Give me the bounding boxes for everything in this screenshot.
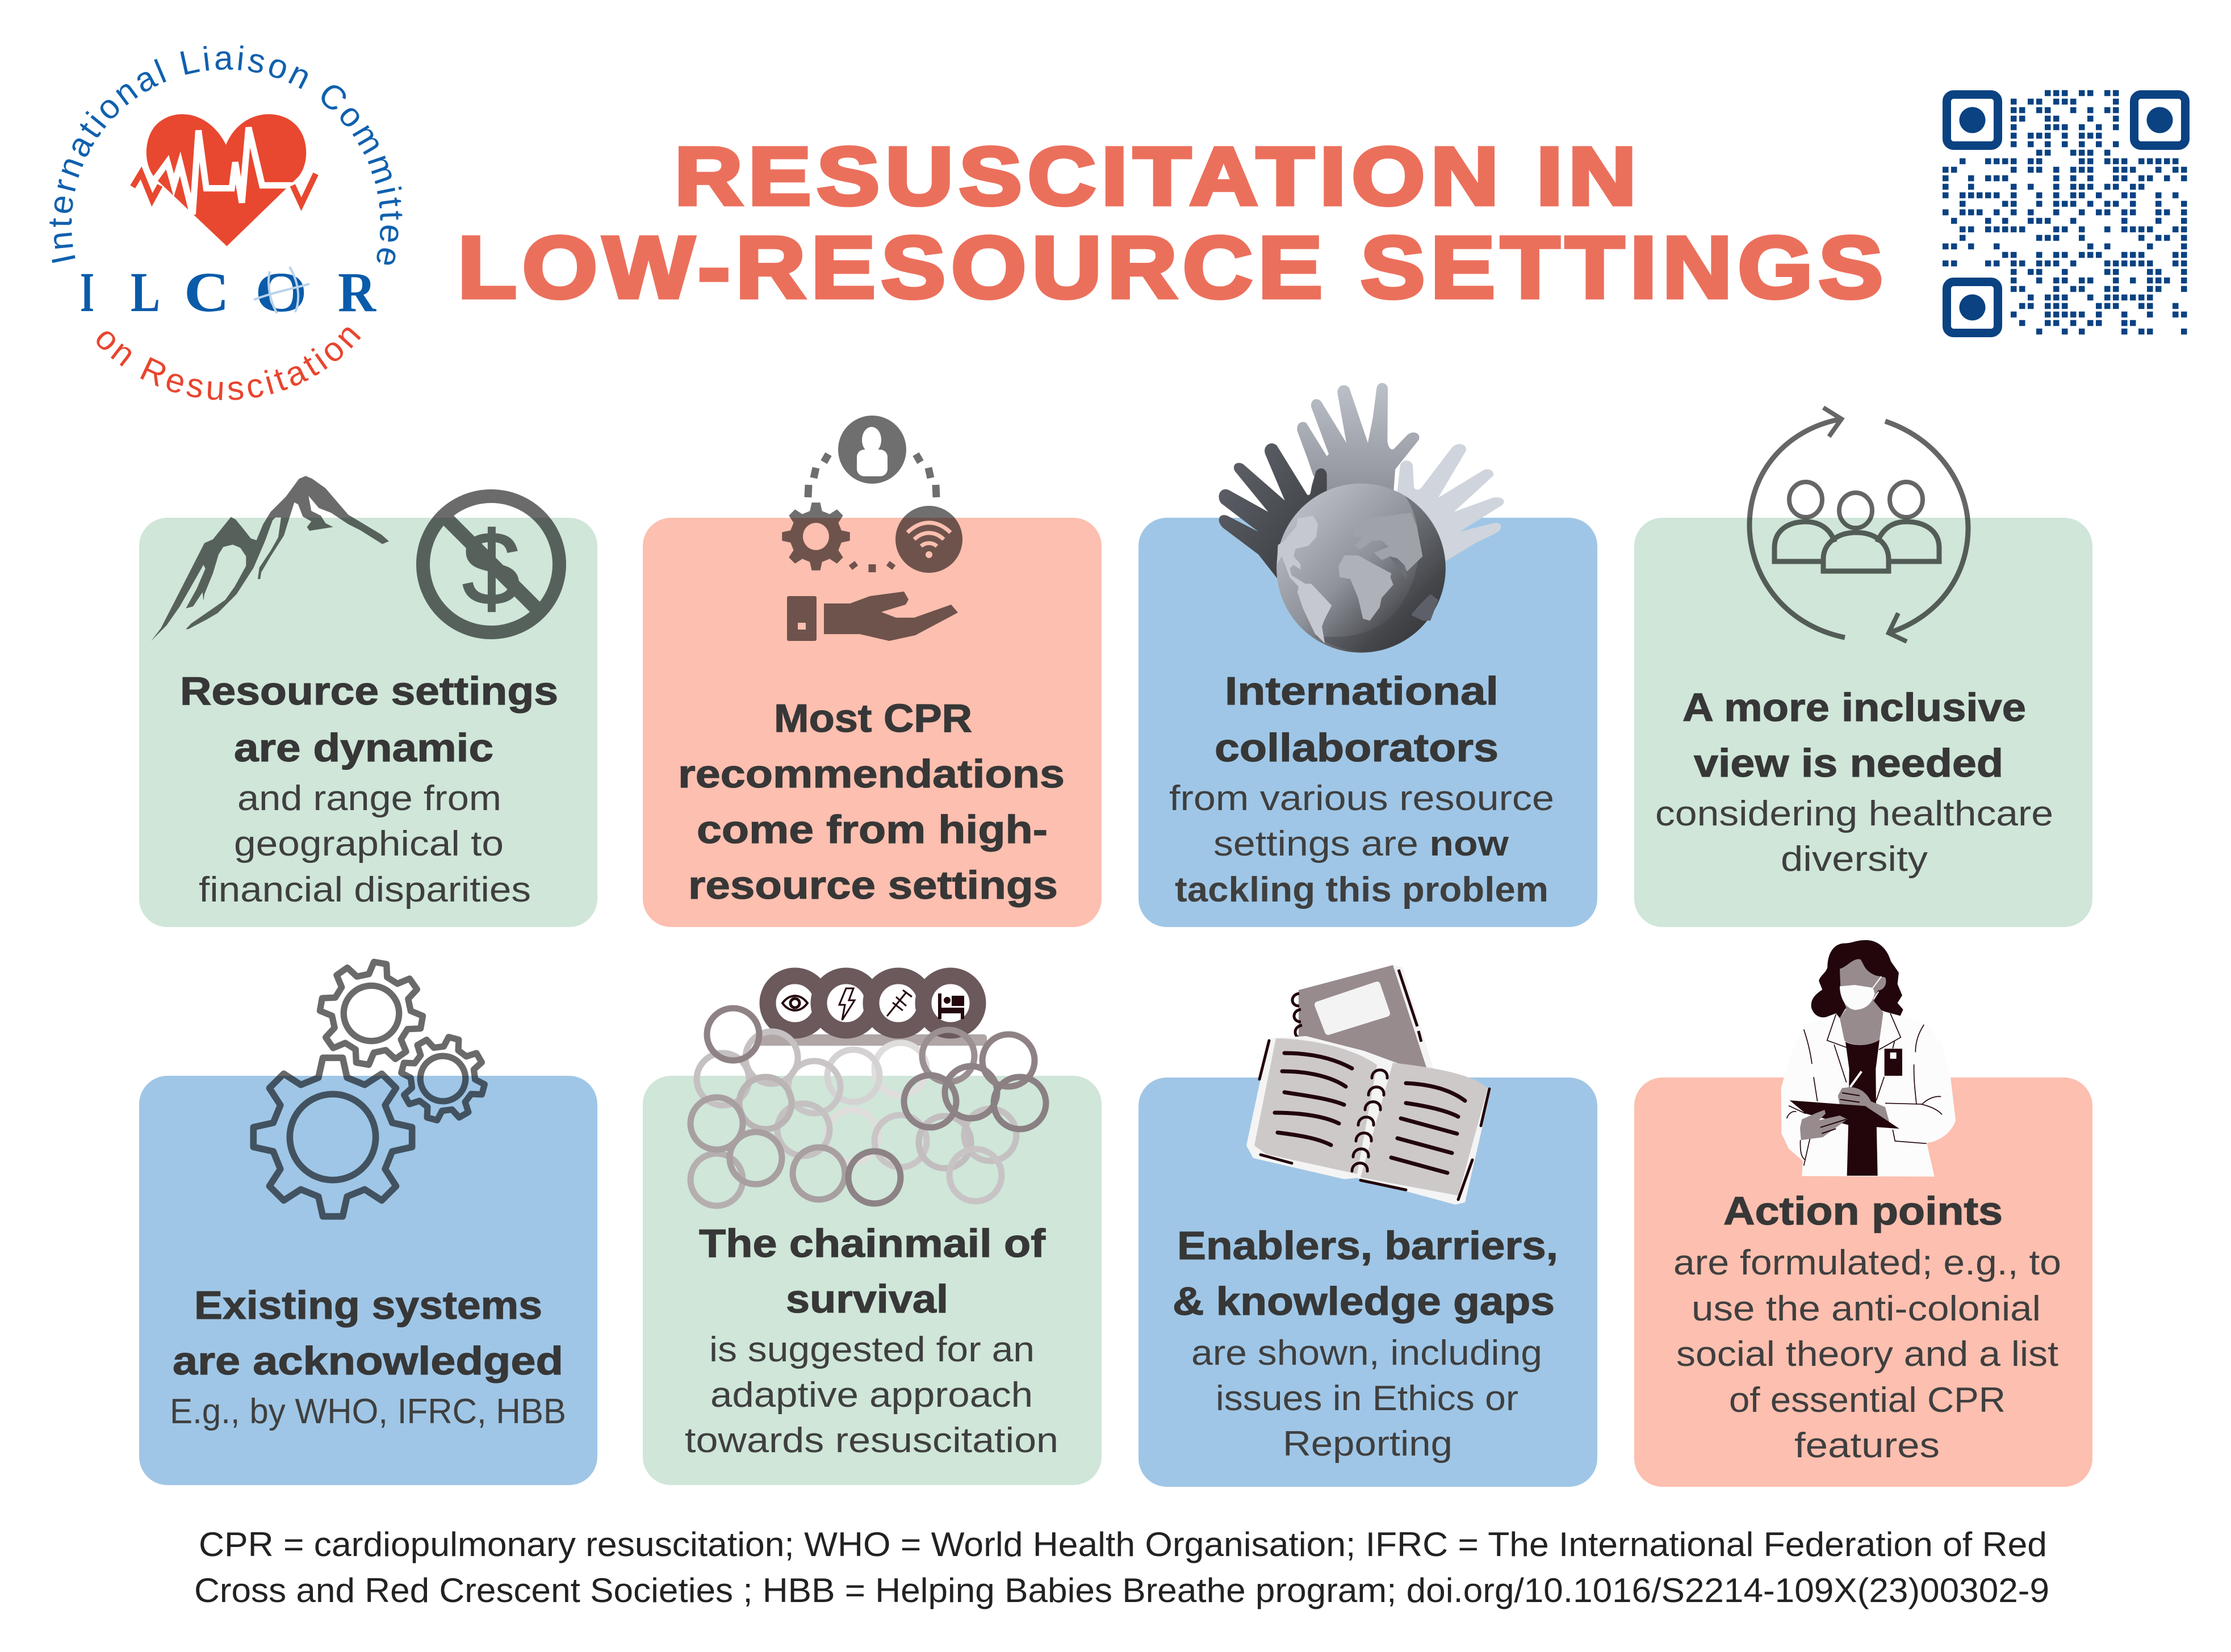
text: enablers: Reporting xyxy=(1283,1424,1453,1464)
panel: action points xyxy=(1634,940,2092,1487)
title xyxy=(458,131,1889,316)
text: inclusive view: view is needed xyxy=(1694,741,2003,785)
text: resource settings xyxy=(180,669,558,909)
text: most CPR: resource settings xyxy=(688,863,1058,907)
panel: existing systems xyxy=(139,954,597,1485)
text: resource settings: are dynamic xyxy=(234,726,493,770)
text: resource settings: geographical to xyxy=(234,824,504,863)
logo heart with ECG trace xyxy=(133,114,316,246)
text: chainmail: is suggested for an xyxy=(709,1330,1035,1369)
text: international collaborators: tackling this problem xyxy=(1175,870,1548,909)
logo ring text: on Resuscitation: on Resuscitation xyxy=(97,327,361,400)
icon: hands around a globe xyxy=(1219,383,1504,653)
text: inclusive view: considering healthcare xyxy=(1655,794,2053,833)
text: inclusive view: A more inclusive xyxy=(1682,685,2026,729)
grey upper hand xyxy=(1297,383,1420,496)
logo wordmark: ILCOR xyxy=(80,261,377,324)
icon: person, gear, wifi and hand xyxy=(782,416,962,641)
icon: no money: $ xyxy=(462,510,520,626)
text: action points: of essential CPR xyxy=(1729,1381,2006,1420)
text: action points: features xyxy=(1794,1426,1940,1465)
panel: most CPR recommendations xyxy=(643,416,1102,927)
icon: three gears xyxy=(253,954,494,1217)
logo wordmark: ILCOR: R xyxy=(338,261,377,324)
dark left hand xyxy=(1219,443,1327,578)
text: chainmail: adaptive approach xyxy=(710,1376,1033,1415)
logo wordmark: ILCOR: L xyxy=(131,261,160,324)
text: action points: are formulated; e.g., to xyxy=(1673,1243,2061,1282)
text: international collaborators: International xyxy=(1225,669,1499,713)
text: international collaborators: from various resource xyxy=(1169,779,1554,818)
text: existing systems: E.g., by WHO, IFRC, HBB xyxy=(170,1392,566,1431)
text: chainmail: survival xyxy=(786,1277,948,1321)
text: enablers: issues in Ethics or xyxy=(1216,1379,1518,1418)
footer: abbreviations and DOI: Cross and Red Crescent Societies ; HBB = Helping Babies Breathe program; doi.org/10.1016/S2214-109X(23)00302-9 xyxy=(194,1571,2049,1609)
logo: ILCOR xyxy=(49,45,402,400)
panel: enablers and barriers xyxy=(1138,965,1597,1487)
logo wordmark: ILCOR: O xyxy=(255,261,307,324)
text: action points: use the anti-colonial xyxy=(1692,1289,2041,1328)
text: action points xyxy=(1673,1189,2061,1465)
logo ring text: International Liaison Committee: International Liaison Committee xyxy=(49,45,402,265)
footer: abbreviations and DOI: CPR = cardiopulmonary resuscitation; WHO = World Health Organisation; IFRC = The International Federation of Red xyxy=(199,1525,2047,1563)
text: resource settings: financial disparities xyxy=(199,870,531,909)
panel: chainmail of survival xyxy=(643,976,1102,1485)
icon: people in a cycle xyxy=(1749,408,1968,641)
text: chainmail xyxy=(685,1221,1058,1460)
text: inclusive view xyxy=(1655,685,2053,879)
icon: chain of survival xyxy=(690,976,1046,1206)
QR code xyxy=(1943,93,2187,333)
logo wordmark: ILCOR: C xyxy=(184,261,229,324)
text: most CPR: recommendations xyxy=(678,752,1065,796)
text: international collaborators: settings are now xyxy=(1213,824,1509,863)
title: RESUSCITATION IN xyxy=(675,131,1642,222)
text: action points: social theory and a list xyxy=(1676,1335,2058,1374)
icon: mountains xyxy=(151,476,389,641)
text: existing systems: are acknowledged xyxy=(173,1339,563,1383)
text: existing systems xyxy=(170,1283,566,1431)
text: existing systems: Existing systems xyxy=(194,1283,542,1327)
text: chainmail: The chainmail of xyxy=(699,1221,1046,1265)
panel: international collaborators xyxy=(1138,383,1597,927)
chainmail rings xyxy=(690,1008,1046,1206)
text: resource settings: and range from xyxy=(237,779,501,818)
text: enablers xyxy=(1173,1223,1558,1464)
text: enablers: Enablers, barriers, xyxy=(1177,1223,1558,1268)
text: enablers: & knowledge gaps xyxy=(1173,1279,1555,1323)
text: most CPR: Most CPR xyxy=(774,696,972,740)
text: enablers: are shown, including xyxy=(1191,1334,1542,1373)
icon: doctor with clipboard xyxy=(1781,940,1956,1177)
globe xyxy=(1276,484,1446,653)
text: inclusive view: diversity xyxy=(1781,840,1928,879)
footer: abbreviations and DOI xyxy=(194,1525,2049,1609)
text: chainmail: towards resuscitation xyxy=(685,1421,1058,1460)
text: most CPR: come from high- xyxy=(697,807,1048,852)
title: LOW-RESOURCE SETTINGS xyxy=(458,219,1889,316)
text: action points: Action points xyxy=(1723,1189,2003,1233)
icon: notebooks xyxy=(1246,965,1491,1205)
panel: more inclusive view xyxy=(1634,408,2092,927)
text: international collaborators xyxy=(1169,669,1554,909)
pale right hand xyxy=(1397,444,1504,561)
text: resource settings: Resource settings xyxy=(180,669,558,713)
logo wordmark: ILCOR: I xyxy=(80,261,94,324)
panel: resource settings xyxy=(139,476,597,927)
text: international collaborators: collaborators xyxy=(1215,726,1499,770)
icon: no money xyxy=(423,496,559,632)
text: most CPR xyxy=(678,696,1065,907)
